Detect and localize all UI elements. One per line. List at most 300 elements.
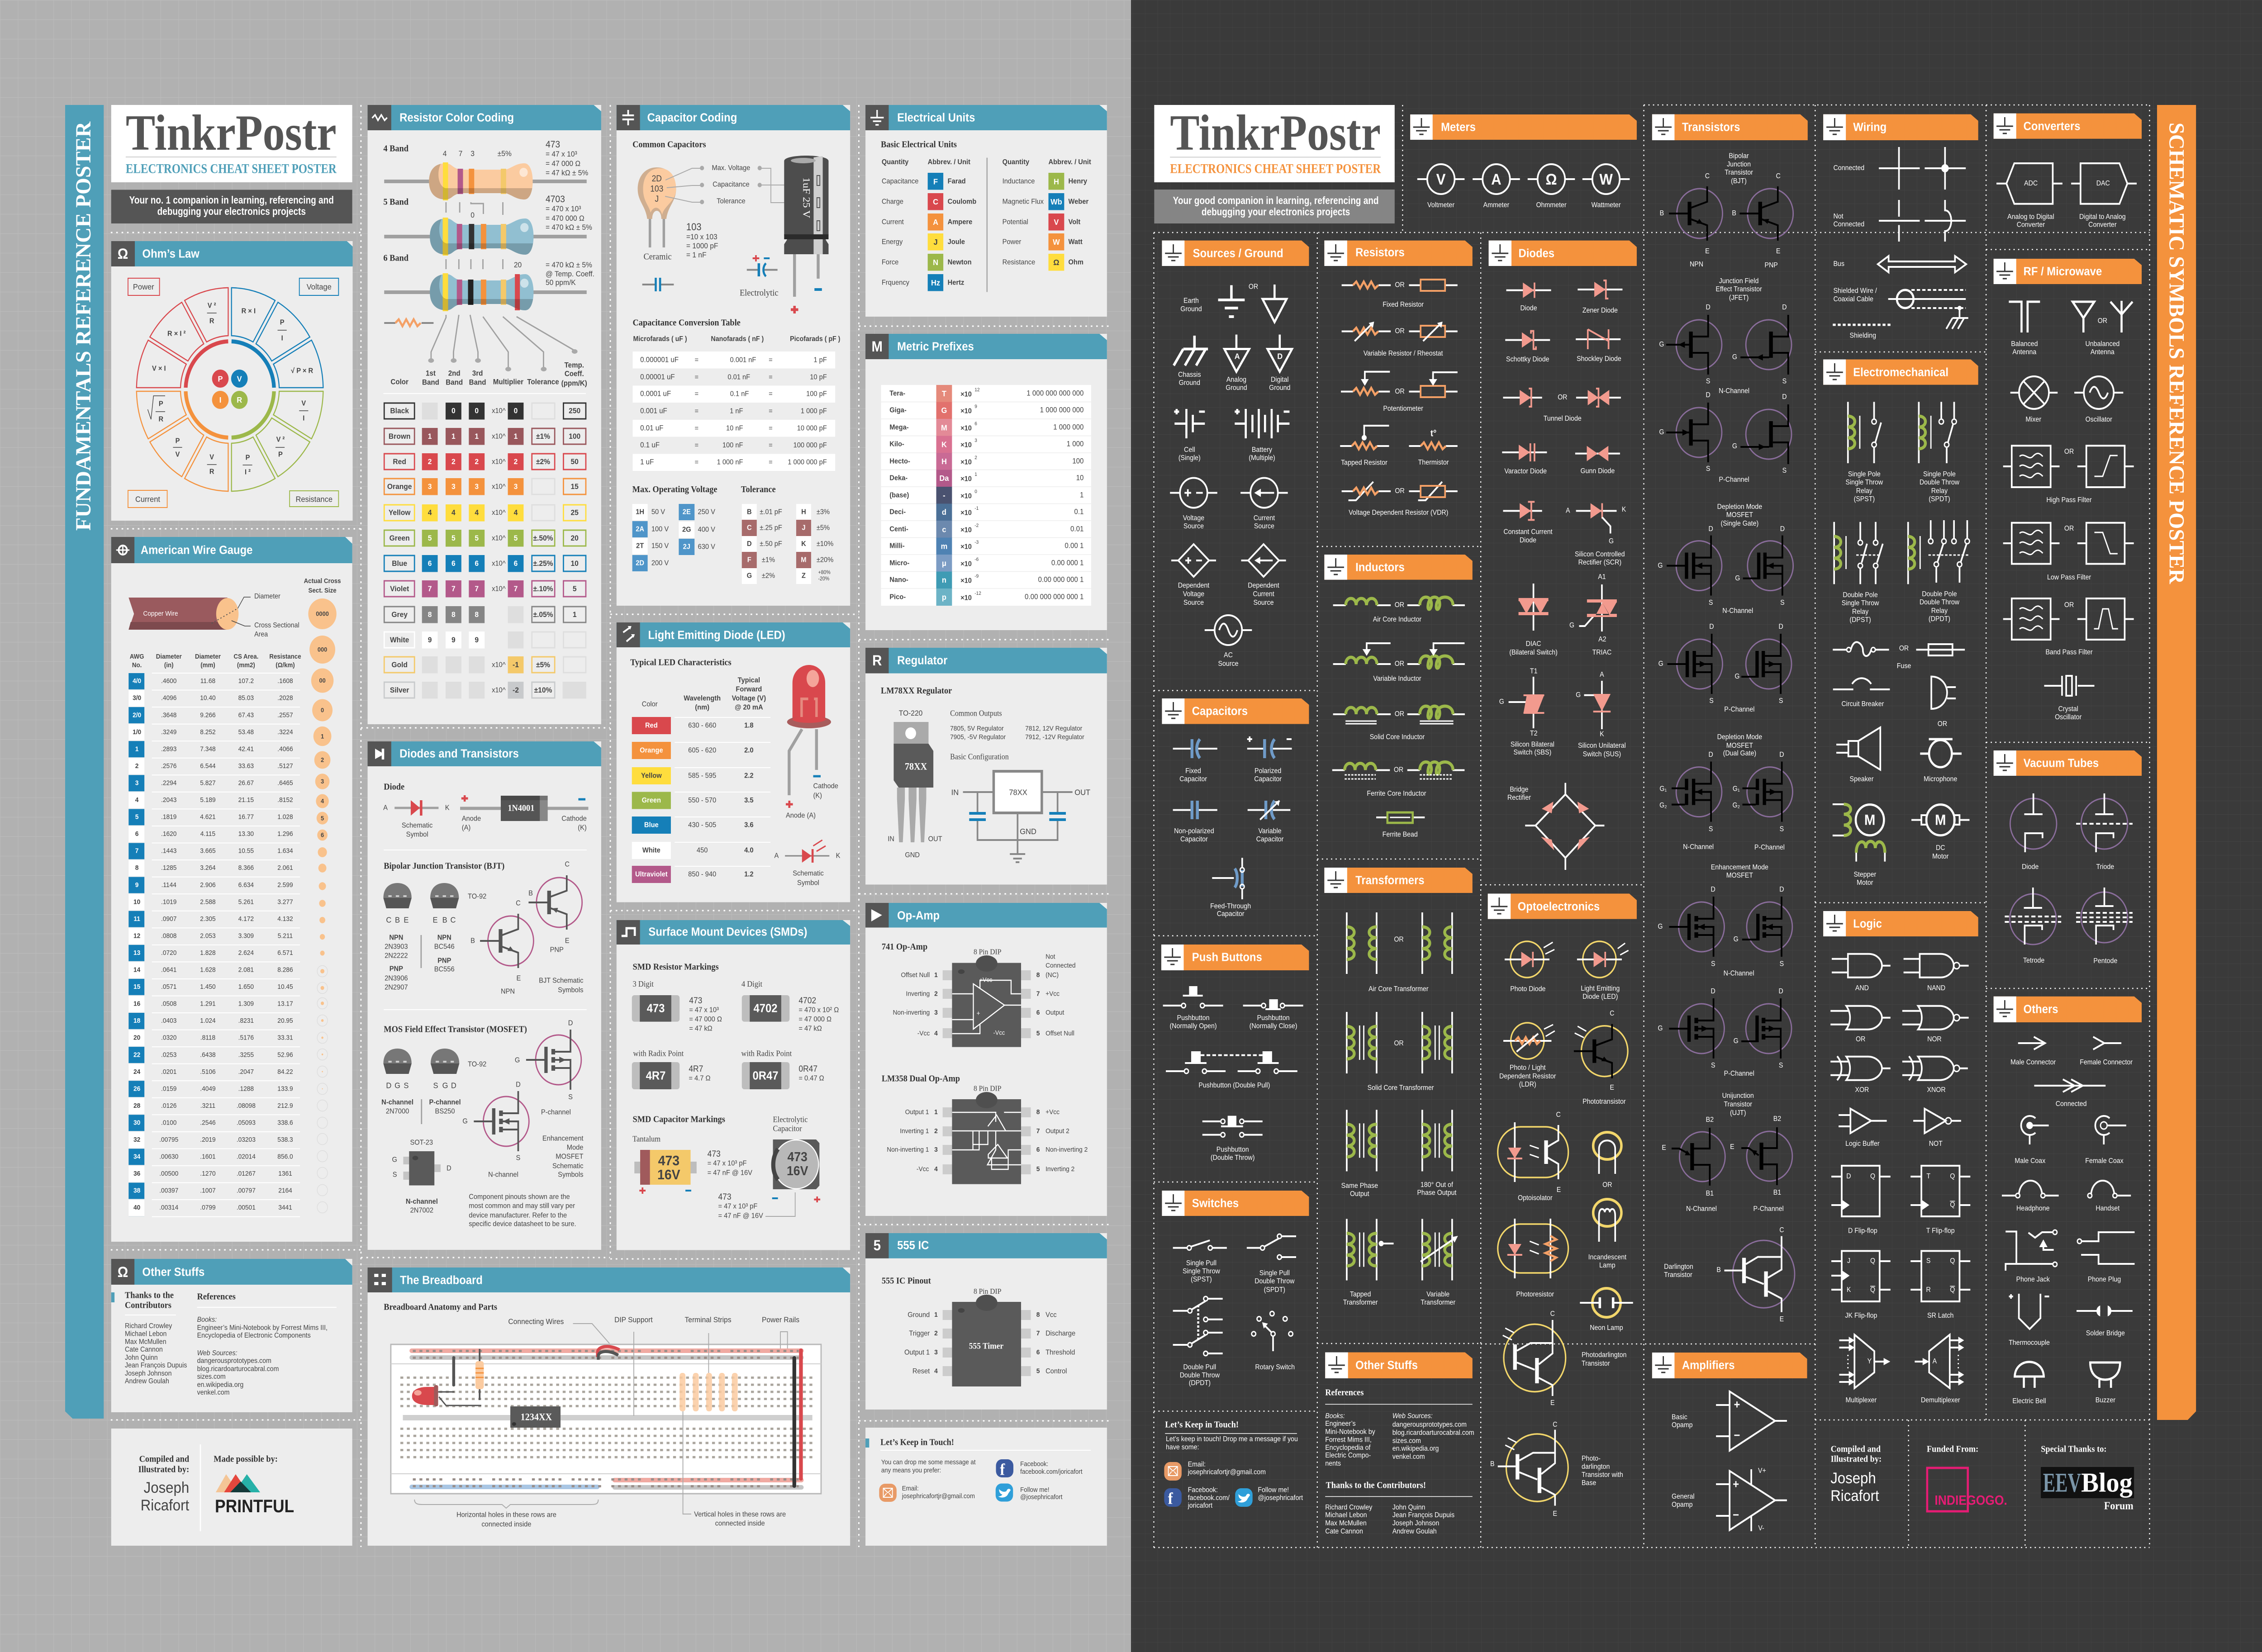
symbol: SR latch [1910,1251,1970,1320]
AWG table: 8 [135,864,138,872]
symbol: stepper motor: M [1864,812,1875,828]
symbol: variable resistor: OR [1395,328,1405,335]
symbol: SBS: G [1499,698,1504,706]
symbol: ferrite core inductor: Ferrite Core Inductor [1367,790,1426,798]
symbol: LDR [1499,1023,1556,1088]
heading: Switches: Switches [1192,1196,1239,1210]
AWG table: 2.588 [200,898,216,906]
AWG table: .5127 [277,762,293,770]
logo: Printful [215,1474,294,1516]
symbol group: depletion MOSFET single gate: G [1658,660,1663,668]
prefix table: ×10 [960,407,972,415]
symbol: ferrite bead [1376,812,1425,839]
symbol: air core inductor: OR [1395,602,1404,609]
panel: credits (light): Made possible by: [214,1454,278,1464]
symbol: DPST relay [1834,522,1883,624]
symbol: non-polarized capacitor: Non-polarized [1174,828,1214,835]
symbol: DPDT relay: (DPDT) [1929,616,1950,623]
symbol: triode: Triode [2096,864,2114,871]
resistor illustrations: 50 ppm/K [546,279,576,287]
panel: switches [1162,1191,1309,1387]
741 pinout: (NC) [1045,972,1059,979]
diode schematic: A [383,804,388,812]
actual size circles: 000 [318,646,327,653]
prefix table: M [941,423,947,432]
AWG table: 3 [135,779,138,787]
symbol group: depletion MOSFET dual gate: G₁ [1733,785,1740,793]
symbol group: depletion MOSFET dual gate: MOSFET [1726,742,1753,750]
colour table: 6 [428,560,432,568]
credits: compiled by (dark): Compiled and [1831,1444,1881,1454]
symbol: pushbutton double pull [1166,1051,1297,1089]
column headers: Resistance [269,653,301,660]
heading: 555 IC: 5 [874,1237,881,1253]
capacitance conversion table: = [695,441,699,449]
symbol group: enhancement MOSFET: G [1734,936,1739,943]
symbol: high pass filter [2003,446,2134,504]
references text: en.wikipedia.org [197,1381,243,1389]
symbol: pentode: Pentode [2093,958,2117,965]
formulas: P [176,437,180,445]
symbol: air core transformer: OR [1394,936,1404,944]
AWG table: .8118 [200,1034,215,1042]
icon: facebook [996,1459,1013,1479]
colour table headers: 2nd [448,370,461,378]
symbol: constant current diode: Diode [1520,536,1536,544]
regulator circuit: IN [951,788,959,797]
panel: keep in touch (light): josephricafortjr@gmail.com [902,1492,975,1500]
prefix table: 0.1 [1074,508,1084,516]
heading: RF / Microwave: RF / Microwave [2024,265,2102,278]
heading: Diodes [1489,241,1637,266]
symbol: T flip-flop: T [1926,1173,1930,1180]
symbol: tapped transformer: Tapped [1350,1291,1371,1298]
741 pinout: Connected [1045,962,1076,969]
formulas: R [209,317,214,325]
units table: C [933,197,938,206]
AWG table: .6465 [277,779,293,787]
symbol: lamp: Incandescent [1588,1254,1627,1261]
741 pinout: 8 Pin DIP [974,947,1001,956]
symbol: LED [1577,941,1629,1001]
side banner: schematic [2157,105,2196,1420]
panel: keep in touch (dark): Facebook: [1188,1486,1218,1494]
AWG table: .3648 [161,712,176,719]
symbol: optoisolator: Optoisolator [1518,1195,1553,1202]
symbol: analog ground: A [1235,351,1240,361]
AWG table: 4.621 [200,813,216,821]
symbol: fixed capacitor: Capacitor [1179,776,1207,783]
symbol: logic buffer [1839,1109,1887,1148]
symbol: TRIAC: G [1569,622,1574,629]
heading: Op-Amp: Op-Amp [897,909,940,922]
LM358 pinout: Inverting 2 [1045,1166,1074,1173]
capacitance conversion table: 100 nF [722,441,743,449]
AWG table: 2.053 [200,932,216,940]
formulas: V [209,453,214,461]
symbol group: depletion MOSFET dual gate: D [1779,751,1784,759]
LED table [630,658,770,883]
MOSFET section: G [394,1081,400,1090]
symbol: variable inductor: Variable Inductor [1373,675,1421,683]
legend boxes [128,278,338,508]
colour table: 3 [514,483,518,491]
symbol group: UJT: B1 [1773,1189,1781,1196]
prefix table: 0.00 000 1 [1051,559,1084,567]
heading: Vacuum Tubes [1994,750,2142,776]
resistor illustrations: = 470 kΩ ± 5% [546,261,592,269]
symbol: pushbutton normally open: Pushbutton [1177,1015,1209,1022]
diode schematic: Diode [384,782,405,792]
741 pinout: 3 [934,1009,938,1016]
BJT section: E [565,937,570,945]
title card: light: ELECTRONICS CHEAT SHEET POSTER [126,161,337,176]
MOSFET section: D [451,1081,456,1090]
SMD resistor markings: = 0.47 Ω [798,1074,824,1082]
colour table: 250 [569,407,580,415]
panel: keep in touch (dark): Email: [1188,1461,1206,1468]
colour table headers: Multiplier [493,378,523,386]
panel: keep in touch (light): Email: [902,1485,919,1492]
regulator text: 7805, 5V Regulator [950,725,1004,732]
prefix table: ×10 [960,577,972,585]
SMD resistor markings: 4 Digit [741,979,762,988]
AWG table: 5.211 [278,932,293,940]
references text: venkel.com [1392,1453,1425,1461]
prefix table: Centi- [889,525,908,533]
tolerance codes: ±1% [762,556,775,564]
symbol: balanced antenna [2009,302,2040,356]
BJT section: BC546 [434,943,455,951]
AWG table: 10.45 [277,983,293,991]
legend boxes: Voltage [307,282,332,291]
heading: Others: Others [2024,1002,2058,1016]
symbol: dependent voltage source: Dependent [1178,582,1210,589]
symbol group: UJT: N-Channel [1686,1206,1717,1213]
AWG table: 30 [133,1119,140,1127]
colour table: Gold [391,661,408,669]
units table: Capacitance [882,177,918,185]
panel: credits (light): Joseph [144,1479,189,1496]
panel: transformers [1324,868,1473,1306]
LED table: Typical [738,676,760,684]
BJT section: C [386,915,391,924]
colour table headers: Tolerance [527,378,559,386]
capacitance conversion table: = [769,424,773,432]
symbol group: JFET: D [1706,392,1711,399]
capacitance conversion table: 1 uF [640,458,654,466]
AWG table: 2164 [278,1187,292,1195]
symbol group: JFET: N-Channel [1719,388,1749,395]
symbol: not connected: Connected [1833,221,1864,228]
formulas: V × I [152,365,166,373]
heading: Meters: Meters [1441,120,1476,134]
column headers: (mm) [200,661,215,669]
symbol: tunnel diode [1503,389,1621,422]
colour table [384,403,586,698]
units table: Hz [931,278,940,287]
formulas: V ² [276,436,285,444]
symbol group: depletion MOSFET dual gate: S [1780,826,1784,833]
TO-220 package: OUT [928,835,942,843]
LED table: 585 - 595 [688,772,716,780]
symbol: constant current diode [1503,502,1553,544]
capacitance conversion table: 1 nF [730,407,743,415]
heading: Meters [1410,114,1637,140]
heading: Wiring: Wiring [1853,120,1887,134]
symbol: D flip-flop [1831,1166,1891,1235]
colour table: 15 [571,483,579,491]
max operating voltage: 2D [636,559,644,567]
symbol: pushbutton double pull: Pushbutton (Double Pull) [1198,1082,1270,1089]
SMD resistor markings: 4R7 [689,1064,703,1073]
MOSFET section: Component pinouts shown are the [469,1193,570,1201]
panel: keep in touch (dark): Let’s Keep in Touch! [1165,1420,1239,1430]
tolerance codes: ±2% [762,572,775,580]
capacitance conversion table: 0.000001 uF [640,356,679,364]
symbol: optoisolator [1498,1111,1568,1202]
symbol: photoresistor: Photoresistor [1516,1291,1554,1298]
symbol group: depletion MOSFET single gate: D [1709,526,1713,533]
resistor illustrations: 0 [470,211,475,219]
panel: optoelectronics [1488,894,1637,1518]
symbol: microphone: Microphone [1924,776,1957,783]
symbol: DC motor: Motor [1932,853,1948,860]
capacitance conversion table: Microfarads ( uF ) [633,335,687,343]
prefix table: 10 [1076,474,1084,482]
heading: American Wire Gauge: American Wire Gauge [141,543,253,557]
symbol: DIAC [1509,584,1558,656]
units table: Potential [1003,218,1028,226]
references text: Electric Compo- [1325,1452,1371,1459]
colour table: Black [390,407,409,415]
symbol group: BJT: E [1776,248,1780,255]
units table: Frquency [882,279,909,287]
AWG table: 14 [133,966,140,974]
symbol: darlington transistor: C [1779,1227,1784,1234]
AWG table: .4049 [200,1085,216,1093]
symbol group: enhancement MOSFET: D [1711,886,1716,893]
AWG table: .1608 [277,678,293,685]
prefix table: 1 000 [1067,440,1084,448]
SMD capacitor markings: Tantalum [632,1135,661,1144]
symbol: variable transformer: Transformer [1421,1299,1455,1306]
LED table: 2.2 [744,772,754,780]
SMD capacitor markings [632,1115,820,1220]
symbol: gunn diode: Gunn Diode [1580,467,1615,475]
capacitance conversion table: = [695,356,699,364]
panel: keep in touch (dark): joricafort [1188,1502,1213,1510]
BJT section: B [395,915,400,924]
MOSFET section: S [404,1081,409,1090]
SMD resistor markings: = 47 x 10³ [689,1006,719,1014]
prefix table: Giga- [889,406,907,414]
symbol: SR latch: S [1926,1258,1930,1265]
resistor illustrations: 4703 [546,194,565,204]
symbol: potentiometer: Potentiometer [1383,405,1423,413]
prefix table: ×10 [960,560,972,568]
symbol group: enhancement MOSFET: G [1734,1038,1739,1045]
MOSFET section: G [462,1117,468,1125]
references text: Web Sources: [197,1350,238,1357]
colour table: 5 [451,534,456,542]
references text: sizes.com [197,1373,226,1381]
555 pinout: Vcc [1045,1311,1057,1319]
colour table headers: Temp. [565,361,584,369]
colour table: 1 [573,610,577,619]
MOSFET section: P-channel [541,1108,571,1116]
colour table headers: Coeff. [565,370,584,378]
AWG table: 11 [133,915,140,923]
prefix table: ×10 [960,424,972,432]
prefix table: Hecto- [889,457,910,465]
symbol: bus: Bus [1833,261,1844,268]
AWG table: 8.286 [277,966,293,974]
symbol: DPDT: Double Throw [1180,1372,1220,1379]
prefix table: 6 [974,421,977,427]
panel: the breadboard [368,1267,850,1546]
max operating voltage: 50 V [651,508,665,516]
tagline bar: light [111,190,352,223]
AWG table: 3.264 [200,864,216,872]
symbol group: JFET: D [1782,394,1787,401]
LED table: Red [645,722,658,730]
symbol: crystal oscillator: Oscillator [2055,714,2081,721]
AWG table: .1819 [161,813,176,821]
symbol group: BJT: B [1660,210,1664,217]
actual size circles: 00 [319,677,326,684]
symbol group: JFET: Junction Field [1719,278,1758,285]
side banner: fundamentals [65,105,104,1419]
colour table: 5 [475,534,479,542]
SMD resistor markings: = 4.7 Ω [689,1074,710,1082]
capacitance conversion table: = [769,458,773,466]
symbol: darlington transistor: E [1780,1316,1784,1323]
741 pinout: +Vcc [979,976,993,983]
symbol: SUS: A [1600,671,1604,679]
symbol: bus [1833,256,1966,272]
symbol: solder bridge: Solder Bridge [2086,1330,2125,1337]
capacitance conversion table: = [769,407,773,415]
column headers: No. [132,661,142,669]
contributors text: Andrew Goulah [1392,1528,1437,1535]
symbol: DPDT relay: Double Throw [1920,599,1959,606]
symbol: electric bell: Electric Bell [2012,1398,2046,1405]
capacitor labels: Capacitance [713,180,750,189]
AWG table: 11.68 [200,678,215,685]
AWG table: .0720 [161,949,176,957]
AWG table: 538.3 [277,1136,293,1144]
symbol: neon lamp [1580,1288,1633,1332]
colour table: x10^ [492,534,506,542]
symbol: multiplexer: Y [1868,1358,1872,1365]
AWG table: .1620 [161,831,176,838]
heading: Logic [1823,911,1978,936]
symbol: OR: OR [1856,1036,1866,1043]
ceramic capacitor [638,167,676,291]
prefix table: T [942,389,946,398]
symbol: darlington transistor: Darlington [1664,1263,1693,1271]
heading: Converters: Converters [2024,119,2081,133]
LED table: Voltage (V) [732,694,766,703]
symbol: phone plug: Phone Plug [2088,1276,2121,1283]
555 pinout: 3 [934,1349,938,1356]
symbol: JK flip-flop: K [1847,1286,1851,1294]
symbol: general opamp [1672,1467,1787,1532]
555 pinout: 8 [1036,1311,1040,1319]
LM358 pinout: Output 2 [1045,1127,1069,1135]
icon: email [1164,1462,1182,1481]
units table: Magnetic Flux [1003,198,1044,206]
colour table: 7 [514,585,518,593]
symbol: bridge rectifier: Bridge [1510,786,1528,793]
panel: keep in touch (light) [865,1428,1107,1546]
heading: Diodes and Transistors: Diodes and Transistors [399,747,519,760]
panel: regulator [865,648,1107,885]
symbol: mixer [2010,376,2058,423]
TO-220 package: IN [888,835,894,843]
SMD capacitor markings: Capacitor [773,1124,802,1133]
symbol: DPDT [1173,1296,1223,1387]
panel: keep in touch (dark): have some: [1166,1444,1199,1451]
symbol group: BJT: C [1776,173,1781,180]
symbol group: depletion MOSFET single gate: S [1709,697,1714,705]
symbol: pushbutton normally close: Pushbutton [1257,1015,1289,1022]
symbol: SCR: G [1609,538,1614,545]
heading: Diodes: Diodes [1519,247,1554,260]
prefix table: Deci- [889,508,906,516]
SMD resistor markings: = 470 x 10² Ω [798,1006,839,1014]
icon: facebook: f [1000,1461,1005,1479]
colour table: 1 [475,432,479,441]
MOSFET section: D [386,1081,391,1090]
references text: blog.ricardoarturocabral.com [1392,1429,1474,1437]
prefix table: -12 [974,591,981,596]
actual size circles [308,598,337,1213]
MOSFET section: P-channel [429,1098,461,1106]
colour table: Orange [387,483,412,491]
symbol: ferrite bead: Ferrite Bead [1383,831,1418,839]
regulator text: 7912, -12V Regulator [1025,734,1084,741]
symbol: pushbutton normally close: (Normally Close) [1250,1023,1297,1030]
symbol: AC source [1205,615,1252,668]
AWG table: 338.6 [277,1119,293,1127]
heading: Electrical Units [865,105,1107,130]
AWG table: .4066 [277,745,293,753]
symbol: speaker: Speaker [1850,776,1873,783]
credits: special thanks: Blog [2081,1468,2133,1498]
symbol: dependent voltage source: Voltage [1183,591,1204,598]
symbol: DIAC: DIAC [1526,641,1541,648]
555 pinout: 5 [1036,1367,1040,1375]
AWG table: 85.03 [238,694,254,702]
741 pinout: Non-inverting [893,1009,930,1016]
741 pinout: 741 Op-Amp [882,942,927,952]
LED illustration [786,665,838,820]
tolerance codes: K [801,540,806,548]
contributors text: Joseph Johnson [125,1370,172,1377]
heading: Converters [1994,114,2142,139]
LM358 pinout: Non-inverting 2 [1045,1146,1088,1154]
breadboard callouts: Vertical holes in these rows are [694,1510,786,1518]
actual size circles: 5 [321,815,324,821]
electrolytic capacitor [740,156,828,313]
colour table: 8 [475,610,479,619]
icon: facebook: f [1168,1490,1173,1508]
symbol: thermistor: t° [1430,429,1436,439]
side banner: schematic: SCHEMATIC SYMBOLS REFERENCE POSTER [2165,123,2188,584]
MOSFET section: BS250 [435,1107,455,1116]
